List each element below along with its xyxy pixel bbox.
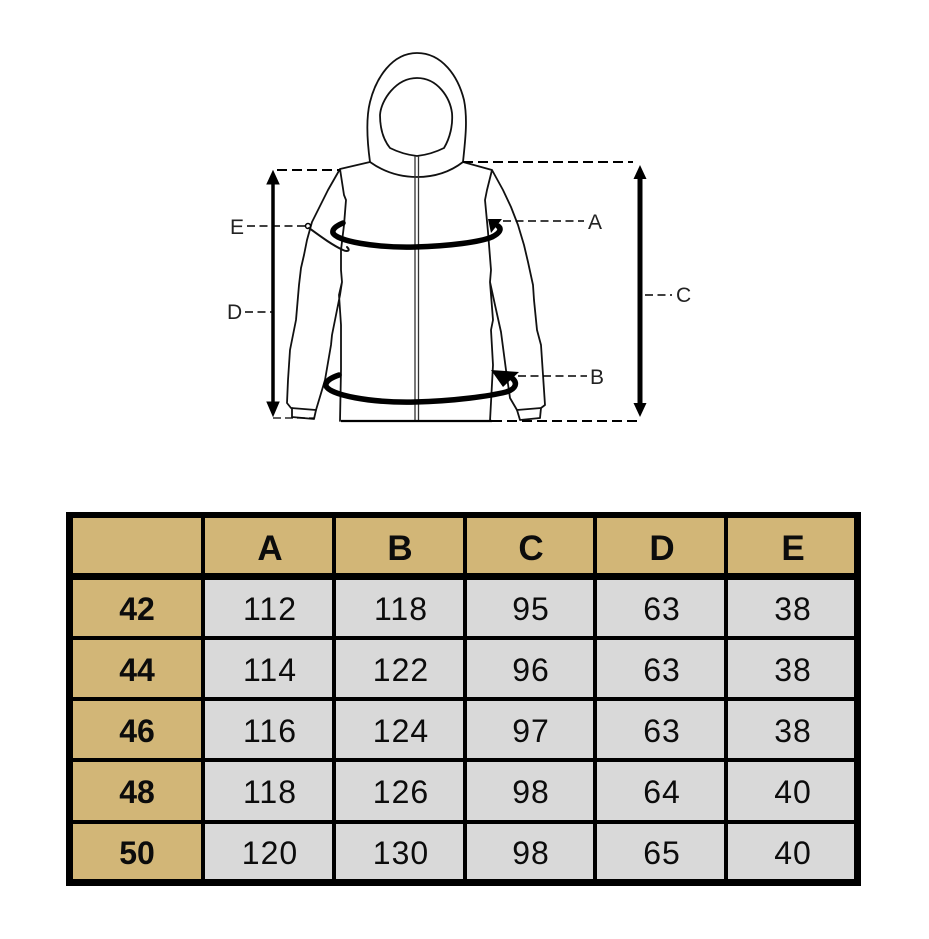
dashed guide lines	[245, 162, 672, 421]
hood	[367, 53, 466, 177]
row: size 44: 38	[774, 652, 812, 688]
row: size 46: 46	[119, 713, 155, 749]
row: size 44: 63	[643, 652, 681, 688]
row: size 48: 126	[373, 774, 429, 810]
row: size 48	[73, 762, 854, 820]
row: size 50	[73, 824, 854, 879]
row: size 46: 38	[774, 713, 812, 749]
row: size 42: 95	[512, 591, 550, 627]
table frame	[66, 512, 861, 886]
left sleeve and side	[287, 162, 370, 421]
row: size 48: 118	[243, 774, 297, 810]
label B: B	[590, 366, 604, 389]
right cuff	[517, 408, 541, 420]
arrow C	[634, 165, 646, 417]
hem	[341, 420, 492, 422]
label D: D	[227, 301, 242, 324]
row: size 42: 118	[374, 591, 428, 627]
size table	[66, 512, 861, 886]
row: size 50: 40	[774, 835, 812, 871]
zipper	[415, 156, 418, 421]
row: size 48: 98	[512, 774, 550, 810]
row: size 44	[73, 640, 854, 697]
row: size 50: 98	[512, 835, 550, 871]
row: size 48: 40	[774, 774, 812, 810]
sleeve measure marker E	[306, 224, 349, 251]
row: size 42: 38	[774, 591, 812, 627]
waist measure band B	[326, 370, 519, 402]
row: size 48: 48	[119, 774, 155, 810]
header row: A	[257, 529, 283, 568]
row: size 42: 42	[119, 591, 155, 627]
row: size 44: 96	[512, 652, 550, 688]
row: size 48: 64	[643, 774, 681, 810]
header row: E	[781, 529, 805, 568]
header row	[73, 518, 854, 573]
row: size 50: 130	[373, 835, 429, 871]
label C: C	[676, 284, 691, 307]
row: size 50: 50	[119, 835, 155, 871]
row: size 42: 63	[643, 591, 681, 627]
row: size 46: 116	[243, 713, 297, 749]
row: size 44: 44	[119, 652, 155, 688]
row: size 44: 122	[373, 652, 429, 688]
row: size 46: 63	[643, 713, 681, 749]
jacket measurement diagram	[227, 53, 691, 421]
row: size 46	[73, 701, 854, 758]
row: size 50: 65	[643, 835, 681, 871]
jacket outline	[287, 53, 545, 421]
row: size 46: 97	[512, 713, 550, 749]
row: size 42	[73, 580, 854, 636]
arrow D	[267, 171, 279, 416]
label A: A	[588, 211, 602, 234]
header row: B	[387, 529, 413, 568]
label E: E	[230, 216, 244, 239]
header row: D	[649, 529, 675, 568]
header row: C	[518, 529, 544, 568]
row: size 42: 112	[243, 591, 297, 627]
row: size 44: 114	[243, 652, 297, 688]
row: size 50: 120	[242, 835, 298, 871]
row: size 46: 124	[373, 713, 429, 749]
left cuff	[292, 408, 316, 419]
chest measure band A	[333, 219, 502, 247]
right sleeve and side	[463, 162, 545, 421]
